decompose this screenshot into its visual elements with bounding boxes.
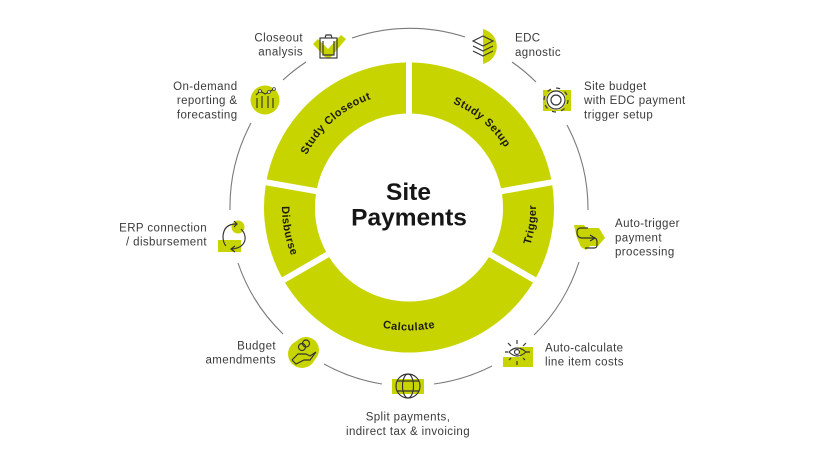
label: on-demand reporting: On-demand bbox=[173, 81, 238, 93]
icon: auto-trigger arrows bbox=[574, 225, 605, 250]
icon: budget gear bbox=[543, 88, 571, 112]
segment: Calculate bbox=[285, 257, 533, 352]
icon: ERP cycle arrows bbox=[218, 220, 245, 252]
icon: reporting chart bbox=[250, 86, 280, 114]
centre title bbox=[351, 179, 467, 232]
label: budget amendments: amendments bbox=[206, 354, 276, 366]
label: site budget: with EDC payment bbox=[583, 95, 686, 107]
centre title: Site bbox=[386, 179, 431, 206]
label: split payments: Split payments, bbox=[366, 412, 450, 424]
label: on-demand reporting: reporting & bbox=[177, 95, 238, 107]
label: split payments: indirect tax & invoicing bbox=[346, 426, 470, 438]
label: ERP connection: / disbursement bbox=[126, 237, 207, 249]
segment: Disburse: Disburse bbox=[282, 206, 296, 255]
segment: Trigger: Trigger bbox=[523, 206, 538, 244]
segment: Study Closeout bbox=[266, 62, 406, 188]
segment: Calculate: Calculate bbox=[384, 320, 434, 331]
label: site budget: Site budget bbox=[584, 81, 647, 93]
segment: Trigger bbox=[492, 185, 554, 278]
icon: EDC layers bbox=[473, 29, 497, 64]
icon: globe bbox=[392, 374, 424, 398]
label: auto-calculate: Auto-calculate bbox=[545, 343, 623, 355]
centre title: Payments bbox=[351, 204, 467, 232]
outer ring arcs bbox=[230, 28, 588, 384]
segment: Disburse bbox=[264, 185, 326, 278]
label: closeout analysis: Closeout bbox=[254, 32, 303, 44]
label: budget amendments: Budget bbox=[237, 340, 276, 352]
icon: auto-calculate eye bbox=[503, 340, 533, 367]
icon: budget hand and coins bbox=[288, 337, 319, 368]
label: ERP connection: ERP connection bbox=[119, 223, 207, 235]
segment: Study Closeout: Study Closeout bbox=[300, 92, 371, 154]
label: EDC agnostic: EDC bbox=[515, 33, 540, 45]
segment: Study Setup: Study Setup bbox=[454, 97, 509, 146]
label: closeout analysis: analysis bbox=[258, 47, 303, 59]
icon: closeout clipboard bbox=[313, 35, 346, 58]
segment: Study Setup bbox=[412, 62, 552, 188]
label: EDC agnostic: agnostic bbox=[515, 47, 561, 59]
label: auto-trigger: processing bbox=[615, 246, 675, 258]
label: site budget: trigger setup bbox=[584, 109, 653, 121]
label: auto-trigger: Auto-trigger bbox=[615, 218, 680, 230]
label: auto-trigger: payment bbox=[615, 232, 662, 244]
label: auto-calculate: line item costs bbox=[545, 357, 624, 369]
label: on-demand reporting: forecasting bbox=[177, 109, 238, 121]
